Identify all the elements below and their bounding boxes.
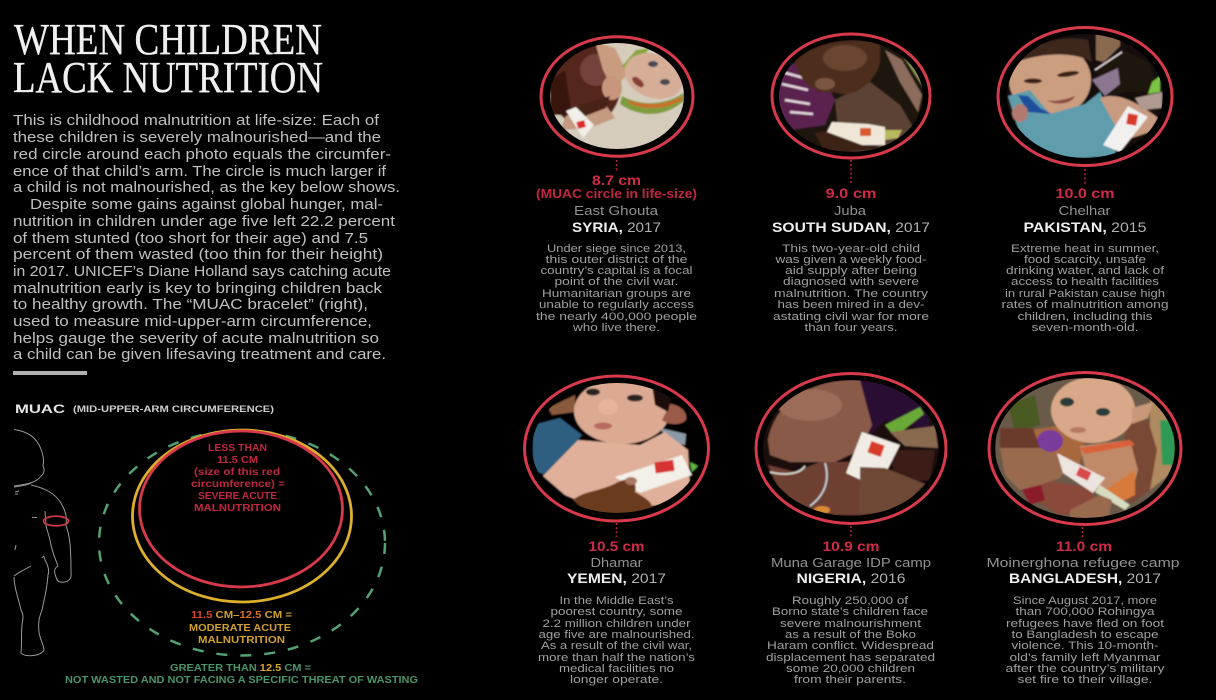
caption: Bangladesh: to Bangladesh to escape bbox=[1012, 629, 1158, 641]
key label: not wasted: GREATER THAN 12.5 CM = bbox=[170, 663, 311, 674]
photo circle: Bangladesh child bbox=[989, 372, 1181, 524]
key label: moderate acute malnutrition: MODERATE ACUTE bbox=[189, 623, 291, 634]
caption: South Sudan: Juba bbox=[834, 204, 866, 218]
caption: Nigeria: Muna Garage IDP camp bbox=[771, 556, 931, 570]
key label: severe acute malnutrition: circumference) = bbox=[191, 479, 285, 490]
caption: Syria: (MUAC circle in life-size) bbox=[536, 187, 697, 201]
caption: Yemen: YEMEN, 2017 bbox=[567, 570, 666, 586]
caption: Pakistan: drinking water, and lack of bbox=[1006, 265, 1165, 277]
caption: Syria: East Ghouta bbox=[574, 204, 658, 218]
caption: Nigeria: from their parents. bbox=[794, 674, 906, 686]
caption: Pakistan: food scarcity, unsafe bbox=[1024, 254, 1146, 266]
caption: South Sudan: has been mired in a dev- bbox=[778, 299, 925, 311]
caption: Bangladesh: than 700,000 Rohingya bbox=[1016, 606, 1154, 618]
intro text block: ence of that child’s arm. The circle is much larger if bbox=[13, 163, 387, 180]
key label: not wasted bbox=[65, 663, 418, 686]
key label: severe acute malnutrition bbox=[191, 443, 285, 514]
caption: Syria: 8.7 cm bbox=[592, 172, 641, 188]
caption: Syria: point of the civil war. bbox=[554, 276, 678, 288]
intro text block: a child can be given lifesaving treatment and care. bbox=[13, 346, 386, 363]
caption: Yemen bbox=[538, 538, 696, 686]
intro text block: helps gauge the severity of acute malnutrition so bbox=[13, 330, 379, 347]
panel: Nigeria bbox=[756, 374, 946, 686]
caption: South Sudan: malnutrition. The country bbox=[774, 288, 929, 300]
caption: Nigeria: displacement has separated bbox=[766, 652, 935, 664]
title: WHEN CHILDREN bbox=[14, 15, 322, 64]
caption: Yemen: In the Middle East’s bbox=[560, 595, 674, 607]
caption: Nigeria: some 20,000 children bbox=[786, 663, 915, 675]
caption: Yemen: 10.5 cm bbox=[588, 538, 644, 554]
caption: Bangladesh: 11.0 cm bbox=[1056, 538, 1112, 554]
key label: moderate acute malnutrition bbox=[189, 610, 292, 646]
key label: severe acute malnutrition: SEVERE ACUTE bbox=[198, 491, 277, 502]
panel: Yemen bbox=[524, 376, 708, 686]
intro text block: in 2017. UNICEF’s Diane Holland says catching acute bbox=[13, 263, 391, 280]
caption: South Sudan: 9.0 cm bbox=[826, 185, 876, 201]
caption: Yemen: 2.2 million children under bbox=[542, 618, 691, 630]
caption: Yemen: poorest country, some bbox=[550, 606, 682, 618]
caption: Syria: who live there. bbox=[572, 322, 660, 334]
caption: Syria bbox=[536, 172, 697, 334]
title: LACK NUTRITION bbox=[13, 53, 323, 102]
caption: South Sudan: was given a weekly food- bbox=[774, 254, 927, 266]
photo circle: Nigeria child bbox=[756, 374, 946, 524]
intro text block: to healthy growth. The “MUAC bracelet” (right), bbox=[13, 296, 368, 313]
caption: Pakistan: access to health facilities bbox=[1011, 276, 1160, 288]
intro text block: of them stunted (too short for their age) and 7.5 bbox=[13, 230, 368, 247]
panel: Bangladesh bbox=[986, 372, 1181, 686]
caption: South Sudan: diagnosed with severe bbox=[783, 276, 919, 288]
caption: Bangladesh: Since August 2017, more bbox=[1013, 595, 1157, 607]
intro text block: malnutrition early is key to bringing children back bbox=[13, 280, 382, 297]
intro text block: a child is not malnourished, as the key below shows. bbox=[13, 179, 400, 196]
caption: Pakistan: Chelhar bbox=[1058, 204, 1110, 218]
intro text block: This is childhood malnutrition at life-size: Each of bbox=[13, 112, 380, 129]
caption: Pakistan: PAKISTAN, 2015 bbox=[1024, 219, 1147, 235]
caption: Nigeria: as a result of the Boko bbox=[785, 629, 916, 641]
caption: Nigeria: 10.9 cm bbox=[822, 538, 880, 554]
intro text block: Despite some gains against global hunger, mal- bbox=[30, 196, 383, 213]
caption: South Sudan bbox=[772, 185, 930, 334]
caption: Pakistan: seven-month-old. bbox=[1032, 322, 1138, 334]
caption: Yemen: medical facilities no bbox=[559, 663, 674, 675]
caption: Nigeria: severe malnourishment bbox=[780, 618, 921, 630]
photo circle: South Sudan child bbox=[772, 34, 930, 158]
key label: moderate acute malnutrition: MALNUTRITION bbox=[198, 635, 285, 646]
caption: South Sudan: This two-year-old child bbox=[782, 243, 920, 255]
intro text block: red circle around each photo equals the circumfer- bbox=[13, 146, 391, 163]
key label: severe acute malnutrition: MALNUTRITION bbox=[194, 503, 281, 514]
caption: Bangladesh: old’s family left Myanmar bbox=[1010, 652, 1161, 664]
caption: Yemen: As a result of the civil war, bbox=[541, 640, 692, 652]
caption: Syria: country’s capital is a focal bbox=[540, 265, 692, 277]
MUAC heading: MUAC bbox=[15, 402, 65, 416]
caption: South Sudan: than four years. bbox=[804, 322, 898, 334]
caption: Syria: this outer district of the bbox=[546, 254, 688, 266]
caption: Syria: Under siege since 2013, bbox=[547, 243, 686, 255]
caption: Pakistan: children, including this bbox=[1018, 311, 1153, 323]
caption: Bangladesh bbox=[986, 538, 1180, 686]
photo circle: Syria child bbox=[541, 37, 693, 156]
key label: moderate acute malnutrition: 11.5 CM– 12.5 CM = bbox=[191, 610, 292, 621]
caption: Pakistan: rates of malnutrition among bbox=[1002, 299, 1168, 311]
photo circle: Yemen child bbox=[524, 376, 708, 521]
intro text block: percent of them wasted (too thin for their height) bbox=[13, 246, 383, 263]
caption: Bangladesh: violence. This 10-month- bbox=[1012, 640, 1159, 652]
MUAC heading bbox=[15, 402, 274, 416]
caption: Bangladesh: BANGLADESH, 2017 bbox=[1009, 570, 1161, 586]
intro text block: used to measure mid-upper-arm circumference, bbox=[13, 313, 372, 330]
caption: Nigeria: NIGERIA, 2016 bbox=[796, 570, 906, 586]
intro text block bbox=[13, 112, 400, 363]
MUAC heading: (MID-UPPER-ARM CIRCUMFERENCE) bbox=[73, 404, 274, 414]
caption: Nigeria bbox=[766, 538, 935, 686]
caption: Pakistan: in rural Pakistan cause high bbox=[1005, 288, 1165, 300]
caption: Pakistan: Extreme heat in summer, bbox=[1011, 243, 1159, 255]
caption: Syria: unable to regularly access bbox=[539, 299, 695, 311]
key label: severe acute malnutrition: (size of this red bbox=[194, 467, 280, 478]
caption: Bangladesh: refugees have fled on foot bbox=[1006, 618, 1164, 630]
caption: Pakistan bbox=[1002, 185, 1168, 334]
title bbox=[13, 15, 323, 102]
caption: Syria: Humanitarian groups are bbox=[542, 288, 691, 300]
icon: child outline with arm band bbox=[14, 430, 71, 656]
caption: Nigeria: Borno state’s children face bbox=[772, 606, 928, 618]
caption: Pakistan: 10.0 cm bbox=[1056, 185, 1114, 201]
caption: South Sudan: astating civil war for more bbox=[773, 311, 929, 323]
caption: Bangladesh: Moinerghona refugee camp bbox=[986, 556, 1180, 570]
key label: severe acute malnutrition: 11.5 CM bbox=[217, 455, 258, 466]
caption: Syria: the nearly 400,000 people bbox=[536, 311, 697, 323]
caption: Nigeria: Roughly 250,000 of bbox=[792, 595, 909, 607]
caption: Bangladesh: after the country’s military bbox=[1006, 663, 1165, 675]
caption: Syria: SYRIA, 2017 bbox=[572, 219, 661, 235]
key label: severe acute malnutrition: LESS THAN bbox=[208, 443, 267, 454]
caption: Nigeria: Haram conflict. Widespread bbox=[767, 640, 934, 652]
panel: Pakistan bbox=[998, 28, 1172, 334]
photo circle: Pakistan child bbox=[998, 28, 1172, 166]
key label: not wasted: NOT WASTED AND NOT FACING A SPECIFIC THREAT OF WASTING bbox=[65, 675, 418, 686]
caption: South Sudan: aid supply after being bbox=[785, 265, 917, 277]
panel: Syria bbox=[536, 37, 697, 334]
caption: Yemen: Dhamar bbox=[590, 556, 642, 570]
intro text block: these children is severely malnourished—and the bbox=[13, 129, 381, 146]
panel: South Sudan bbox=[772, 34, 930, 334]
caption: Yemen: longer operate. bbox=[570, 674, 663, 686]
MUAC circles key bbox=[99, 430, 385, 656]
intro text block: nutrition in children under age five left 22.2 percent bbox=[13, 213, 396, 230]
caption: Yemen: age five are malnourished. bbox=[538, 629, 694, 641]
caption: Yemen: more than half the nation’s bbox=[538, 652, 696, 664]
caption: Bangladesh: set fire to their village. bbox=[1018, 674, 1152, 686]
caption: South Sudan: SOUTH SUDAN, 2017 bbox=[772, 219, 930, 235]
